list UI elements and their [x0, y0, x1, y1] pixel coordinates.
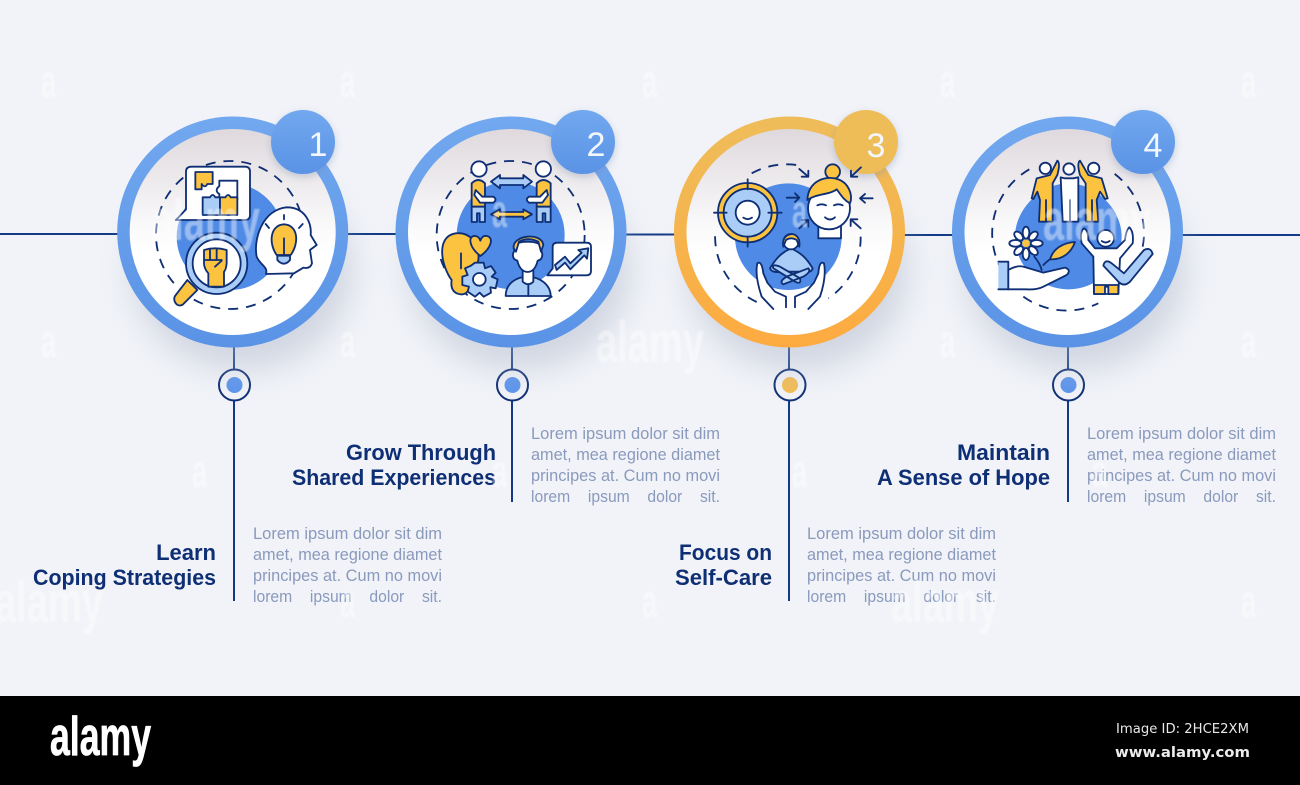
step 1 [33, 110, 442, 606]
step 4 body text: amet, mea regione diamet [1087, 446, 1276, 464]
step 1 heading line 2: Coping Strategies [33, 565, 216, 590]
icon: puzzle, fist, lightbulb head [156, 161, 317, 309]
watermarks: a [792, 445, 807, 497]
footer image id: Image ID: 2HCE2XM [1116, 721, 1249, 737]
step 4 body text: principes at. Cum no movi [1087, 467, 1276, 485]
step 2 body text: lorem ipsum dolor sit. [531, 488, 720, 506]
step 4 body text [1087, 425, 1276, 506]
watermarks: alamy [596, 310, 704, 375]
step 1 circle [117, 110, 352, 370]
watermarks [0, 55, 1256, 635]
watermarks: a [340, 315, 355, 367]
step 4 heading line 2: A Sense of Hope [877, 465, 1050, 490]
step 1 body text: amet, mea regione diamet [253, 546, 442, 564]
step 2 circle [396, 110, 630, 370]
step 1 heading: Learn [156, 540, 216, 565]
step 3 [674, 110, 996, 606]
footer bar [0, 696, 1300, 785]
step 4 body text: lorem ipsum dolor sit. [1087, 488, 1276, 506]
watermarks: a [642, 55, 657, 107]
watermarks: a [940, 315, 955, 367]
step 3 body text: Lorem ipsum dolor sit dim [807, 525, 996, 543]
step 1 body text: principes at. Cum no movi [253, 567, 442, 585]
step 2 body text [531, 425, 720, 506]
step 2 heading line 2: Shared Experiences [292, 465, 496, 490]
step 3 stem and marker [774, 345, 806, 601]
icon: group, flower in hand, person with check [992, 161, 1153, 311]
watermarks: alamy [1043, 188, 1151, 253]
watermarks: a [192, 445, 207, 497]
step 1 body text [253, 525, 442, 606]
step 3 circle [674, 110, 908, 370]
step 4 [877, 110, 1276, 506]
step 1 body text: lorem ipsum dolor sit. [253, 588, 442, 606]
step 4 circle [952, 110, 1186, 370]
step 3 heading: Focus on [679, 540, 772, 565]
step 3 body text: principes at. Cum no movi [807, 567, 996, 585]
watermarks: a [792, 185, 807, 237]
watermarks: a [1241, 575, 1256, 627]
step 3 heading line 2: Self-Care [675, 565, 772, 590]
step 3 number: 3 [867, 127, 885, 165]
step 4 number: 4 [1144, 127, 1162, 165]
step 2 stem and marker [497, 345, 528, 502]
watermarks: a [340, 575, 355, 627]
step 2 heading: Grow Through [346, 440, 496, 465]
watermarks: a [41, 55, 56, 107]
step 2 body text: amet, mea regione diamet [531, 446, 720, 464]
watermarks: a [940, 55, 955, 107]
watermarks: a [41, 315, 56, 367]
step 2 body text: Lorem ipsum dolor sit dim [531, 425, 720, 443]
step 4 heading: Maintain [957, 440, 1050, 465]
watermarks: a [1241, 315, 1256, 367]
step 3 body text: lorem ipsum dolor sit. [807, 588, 996, 606]
footer url: www.alamy.com [1115, 745, 1250, 761]
step 2 number: 2 [587, 126, 605, 164]
step 1 stem and marker [219, 345, 250, 601]
watermarks: alamy [152, 188, 260, 253]
step 3 body text [807, 525, 996, 606]
watermarks: a [1241, 55, 1256, 107]
step 2 body text: principes at. Cum no movi [531, 467, 720, 485]
footer logo: alamy [50, 705, 151, 767]
watermarks: a [492, 445, 507, 497]
watermarks: a [492, 185, 507, 237]
step 2 [292, 110, 720, 506]
watermarks: a [340, 55, 355, 107]
icon: target, woman, meditation in hands [714, 164, 873, 309]
watermarks: a [642, 575, 657, 627]
step 1 number: 1 [309, 126, 327, 164]
step 4 stem and marker [1053, 345, 1084, 502]
step 1 body text: Lorem ipsum dolor sit dim [253, 525, 442, 543]
watermarks: alamy [891, 570, 999, 635]
icon: people exchanging, bulb, man, chart [437, 161, 591, 309]
timeline connector [0, 234, 1300, 235]
step 3 body text: amet, mea regione diamet [807, 546, 996, 564]
watermarks: a [1092, 445, 1107, 497]
step 4 body text: Lorem ipsum dolor sit dim [1087, 425, 1276, 443]
